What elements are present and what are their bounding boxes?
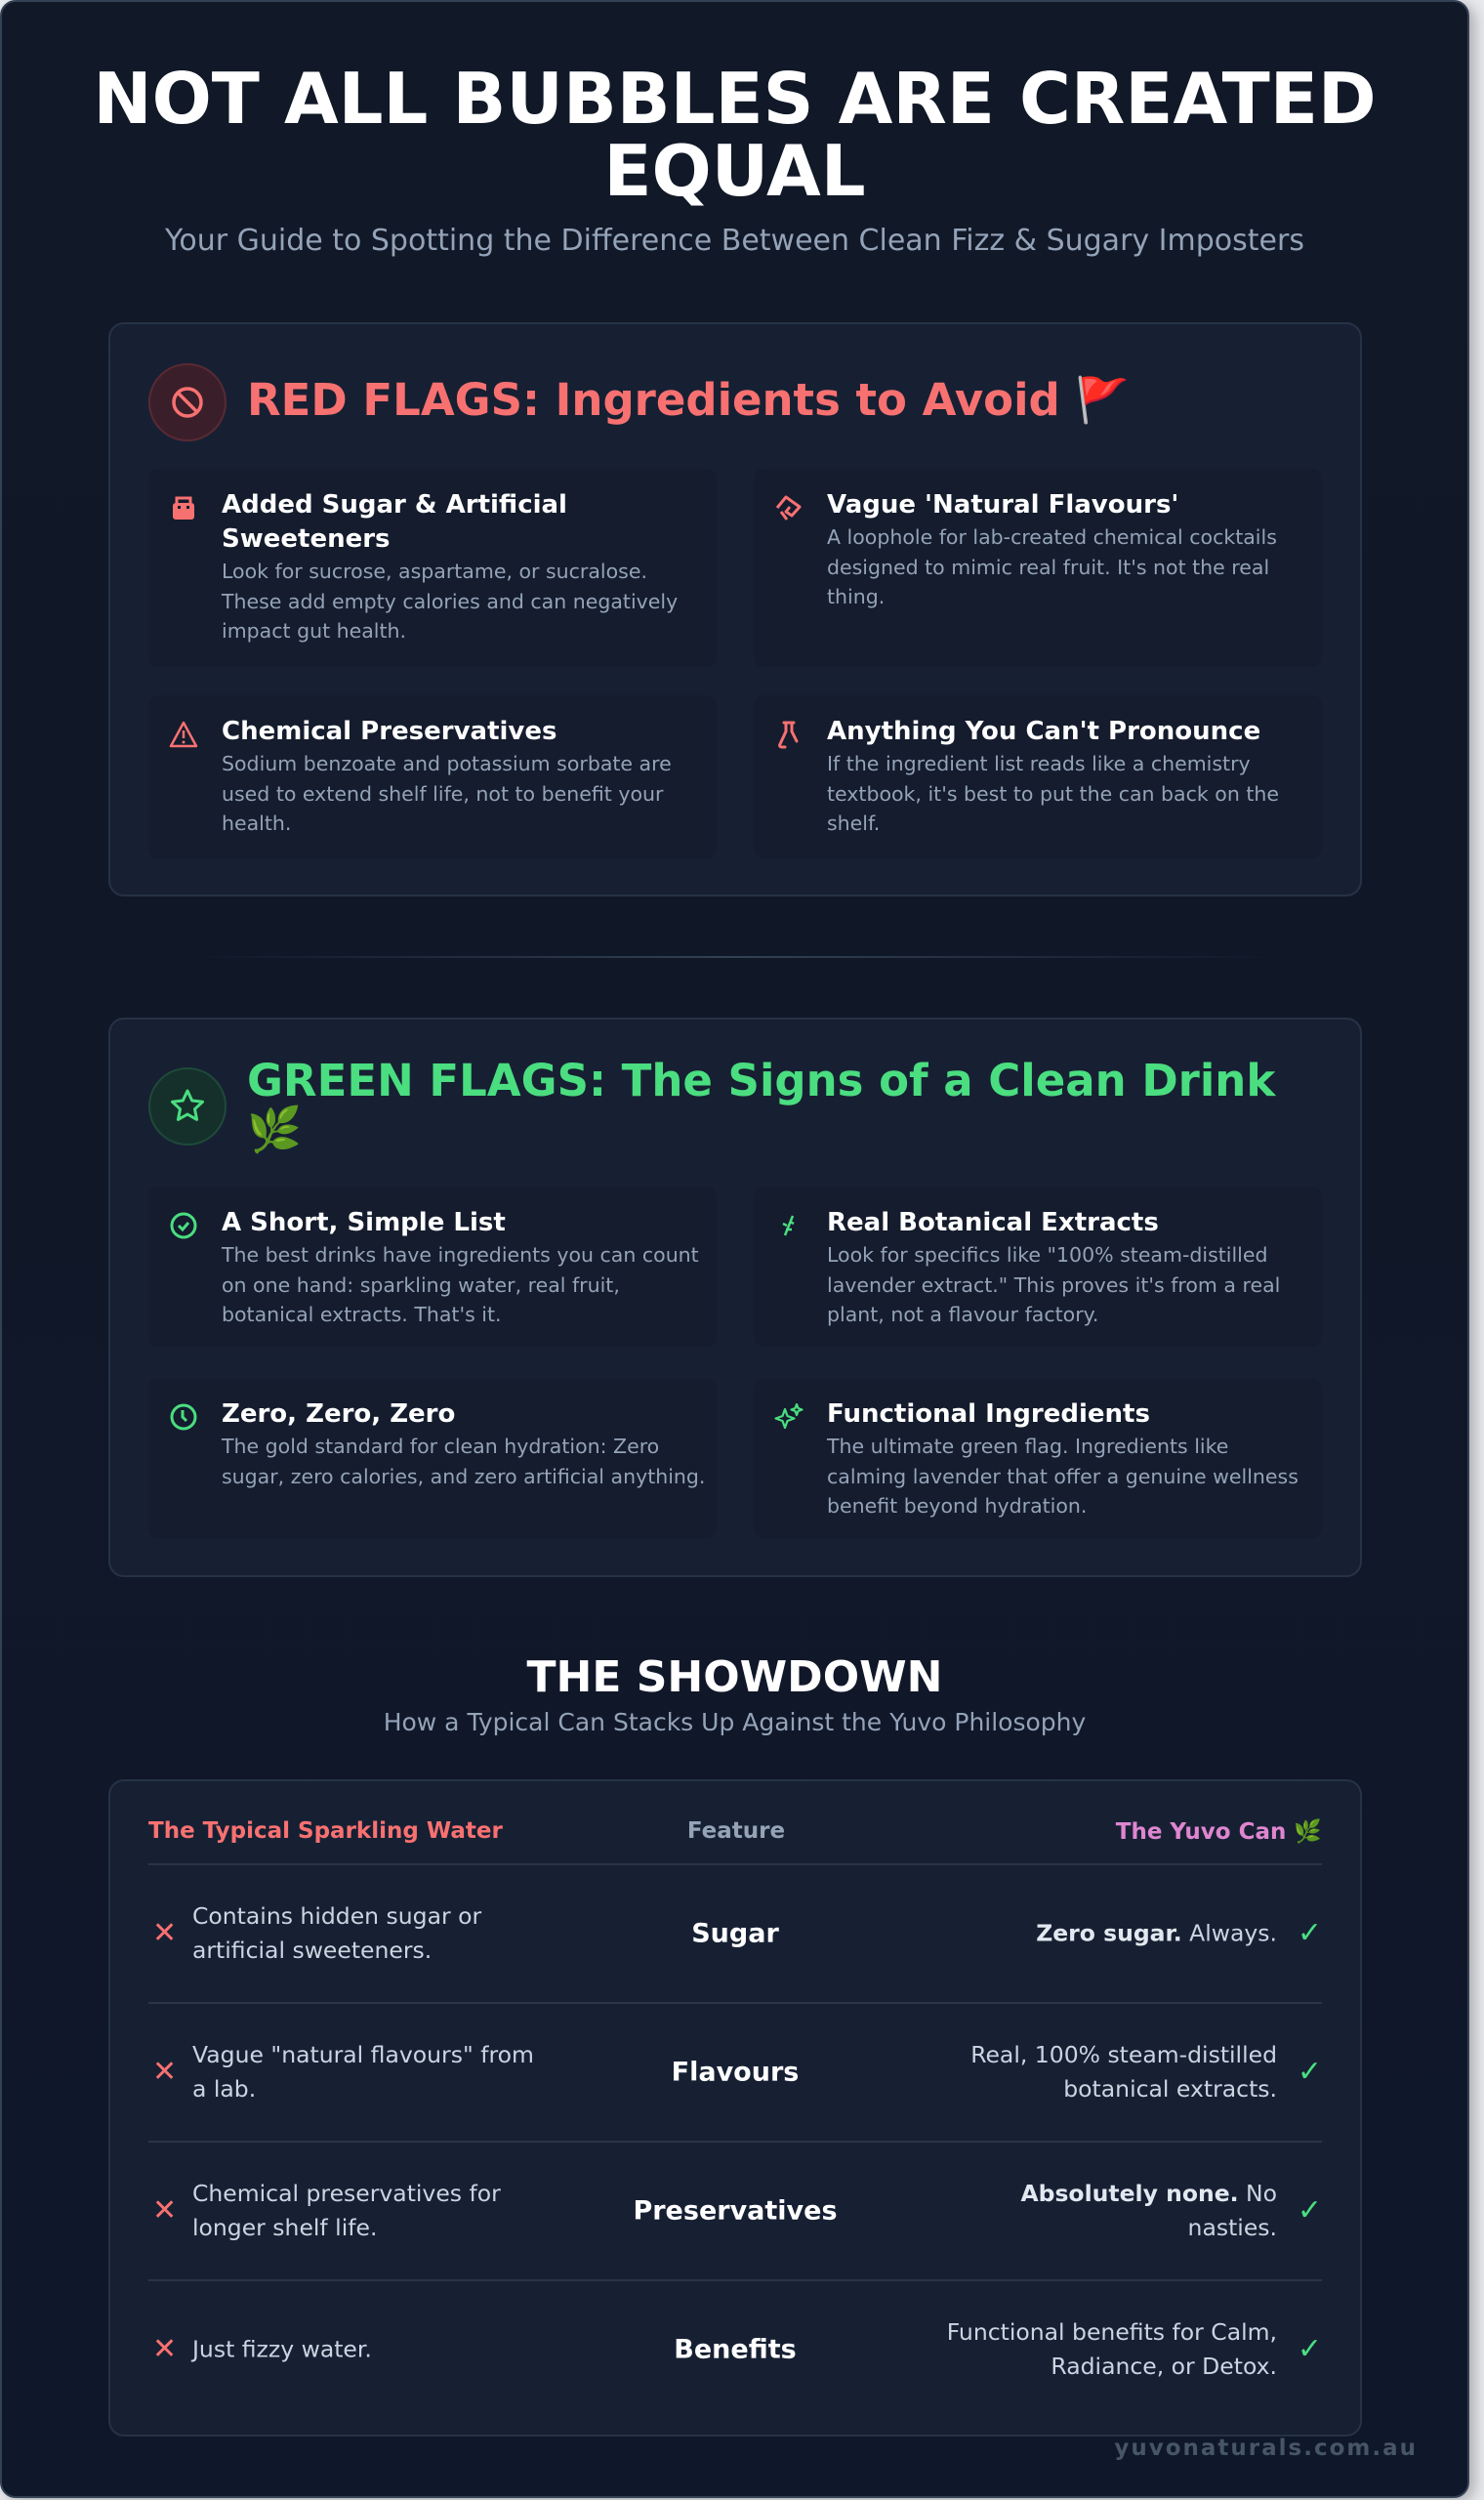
subheading: showdown: How a Typical Can Stacks Up Against the Yuvo Philosophy	[384, 1708, 1086, 1736]
row: benefits: Functional benefits for Calm,	[947, 2318, 1277, 2346]
row: benefits: ✓	[1298, 2332, 1322, 2366]
row: sugar: Contains hidden sugar or artificial sweeteners.	[192, 1902, 481, 1964]
icon: hand	[775, 495, 802, 521]
row: preservatives: Absolutely none. No	[1020, 2180, 1277, 2207]
icon: check circle	[170, 1213, 197, 1238]
row: benefits: ✕	[152, 2332, 177, 2366]
card: functional: Functional Ingredients	[827, 1399, 1150, 1429]
row: preservatives: Preservatives	[633, 2195, 838, 2227]
card: functional	[754, 1378, 1322, 1538]
card: preservatives: Sodium benzoate and potassium sorbate are used to extend shelf life, not to benefit your health.	[222, 752, 672, 835]
row: preservatives: ✕	[152, 2193, 177, 2228]
panel: comparison table	[108, 1779, 1362, 2437]
icon: sprig	[783, 1215, 795, 1236]
row: flavours: Flavours	[672, 2057, 799, 2088]
icon: clock	[170, 1404, 197, 1430]
panel: red flags	[108, 322, 1362, 896]
row: preservatives: ✓	[1298, 2193, 1322, 2228]
row: flavours	[152, 2041, 1322, 2103]
subtitle: Your Guide to Spotting the Difference Between Clean Fizz & Sugary Imposters	[165, 224, 1304, 258]
row: sugar: Zero sugar. Always.	[1036, 1920, 1277, 1947]
panel: green flags	[108, 1018, 1362, 1577]
card: natural flavours	[754, 469, 1322, 667]
title	[93, 58, 1377, 212]
row: sugar: ✕	[152, 1916, 177, 1950]
card: preservatives	[148, 695, 717, 858]
row: flavours: Real, 100% steam-distilled botanical extracts.	[970, 2041, 1277, 2103]
row: flavours: ✓	[1298, 2055, 1322, 2089]
card: short list: A Short, Simple List	[222, 1208, 506, 1237]
row: flavours: Vague "natural flavours" from a lab.	[192, 2041, 534, 2103]
row: sugar: ✓	[1298, 1916, 1322, 1950]
row: sugar	[152, 1902, 1322, 1964]
row: benefits	[152, 2318, 1322, 2380]
table header: feature: Feature	[687, 1818, 785, 1844]
title: EQUAL	[603, 130, 866, 212]
icon: flask	[778, 721, 799, 748]
card: added sugar: Added Sugar & Artificial Sweeteners	[222, 490, 567, 554]
icon: prohibited	[148, 363, 227, 441]
card: zero	[148, 1378, 717, 1538]
table header: yuvo: The Yuvo Can 🌿	[1116, 1819, 1322, 1845]
card: botanical	[754, 1187, 1322, 1347]
row: flavours: ✕	[152, 2055, 177, 2089]
title: NOT ALL BUBBLES ARE CREATED	[93, 58, 1377, 140]
row: benefits: Benefits	[674, 2334, 797, 2365]
card: functional: The ultimate green flag. Ingredients like calming lavender that offer a genuine wellness benefit beyond hydration.	[827, 1435, 1298, 1518]
card: added sugar: Look for sucrose, aspartame, or sucralose. These add empty calories and can negatively impact gut health.	[222, 560, 678, 643]
row: preservatives: nasties.	[1188, 2214, 1277, 2241]
icon: sparkles	[774, 1402, 804, 1430]
card: zero: The gold standard for clean hydration: Zero sugar, zero calories, and zero artificial anything.	[222, 1435, 705, 1488]
card: cant pronounce: If the ingredient list reads like a chemistry textbook, it's best to put the can back on the shelf.	[827, 752, 1279, 835]
icon: warning	[170, 721, 197, 748]
heading: the showdown: THE SHOWDOWN	[527, 1652, 942, 1702]
card: cant pronounce	[754, 695, 1322, 858]
card: short list	[148, 1187, 717, 1347]
card: preservatives: Chemical Preservatives	[222, 717, 556, 746]
card: botanical: Look for specifics like "100% steam-distilled lavender extract." This proves it's from a real plant, not a flavour factory.	[827, 1243, 1280, 1326]
icon: sugar box	[173, 496, 194, 520]
card: natural flavours: Vague 'Natural Flavours'	[827, 490, 1178, 520]
icon: star	[148, 1067, 227, 1146]
card: short list: The best drinks have ingredients you can count on one hand: sparkling water, real fruit, botanical extracts. That's it.	[222, 1243, 699, 1326]
row: benefits: Just fizzy water.	[192, 2336, 372, 2363]
row: benefits: Radiance, or Detox.	[1051, 2353, 1277, 2380]
card: natural flavours: A loophole for lab-created chemical cocktails designed to mimic real fruit. It's not the real thing.	[827, 525, 1277, 608]
card: botanical: Real Botanical Extracts	[827, 1208, 1159, 1237]
row: preservatives: Chemical preservatives for longer shelf life.	[192, 2180, 501, 2241]
heading: green flags: GREEN FLAGS: The Signs of a Clean Drink 🌿	[247, 1055, 1275, 1155]
footer: website: yuvonaturals.com.au	[1114, 2436, 1418, 2461]
row: sugar: Sugar	[691, 1918, 779, 1949]
row: preservatives	[152, 2180, 1322, 2241]
heading: red flags: RED FLAGS: Ingredients to Avoid 🚩	[247, 374, 1130, 426]
table header: typical: The Typical Sparkling Water	[148, 1818, 503, 1844]
card: added sugar	[148, 469, 717, 667]
card: cant pronounce: Anything You Can't Pronounce	[827, 717, 1260, 746]
card: zero: Zero, Zero, Zero	[222, 1399, 455, 1429]
